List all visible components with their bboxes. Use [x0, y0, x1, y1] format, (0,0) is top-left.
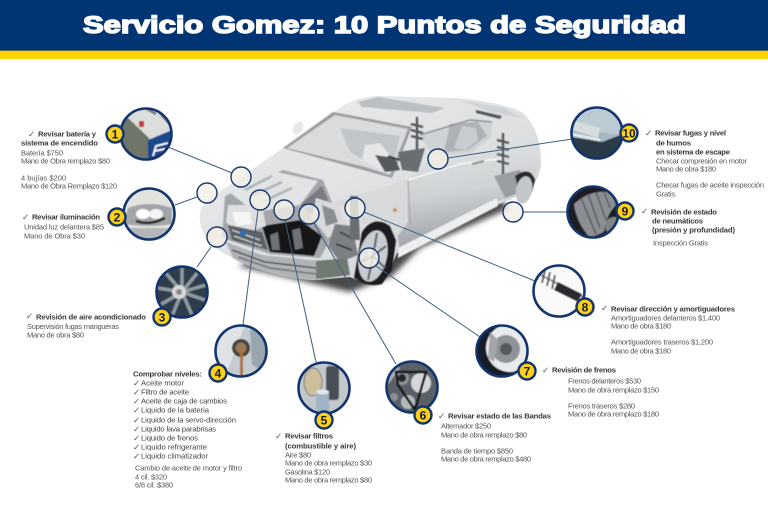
text: point 8: Mano de obra $180 — [611, 346, 671, 356]
text: point 8: ✓ — [601, 304, 608, 314]
connector lines — [168, 139, 572, 364]
text: point 1: 4 bujías $200 — [21, 174, 66, 182]
text: point 10: Checar fugas de aceite inspección — [656, 180, 764, 190]
text: point 7: Frenos traseros $280 — [568, 402, 635, 410]
text: point 5: ✓ — [275, 432, 282, 442]
text: fluid checklist: 4 cil. $320 — [135, 472, 167, 482]
text: point 3 — [26, 312, 146, 340]
text: point 2: Unidad luz delantera $85 — [24, 222, 104, 232]
text: fluid checklist: Liquido de frenos — [141, 434, 198, 442]
door and rear quarter — [397, 135, 540, 250]
front wheel — [354, 221, 396, 285]
text: point 3: Supervisión fugas mangueras — [27, 322, 119, 331]
text: fluid checklist: 6/8 cil. $380 — [135, 480, 173, 490]
text: point 9: Revisión de estado — [651, 208, 717, 216]
car hotspot markers — [197, 149, 523, 268]
front strut — [411, 117, 423, 150]
icon: oil pour: 4 — [215, 366, 222, 380]
text: point 7: Frenos delanteros $530 — [568, 376, 641, 386]
text: point 5: Mano de obra remplazo $30 — [285, 458, 372, 468]
text: point 3: ✓ — [26, 312, 33, 322]
point 7: brakes — [476, 324, 659, 418]
engine bay — [222, 170, 340, 258]
icon: brake disc — [476, 324, 536, 380]
text: point 5: Revisar filtros — [285, 432, 333, 440]
text: point 6: ✓ — [438, 412, 445, 422]
text: point 1: Mano de Obra remplazo $80 — [21, 156, 110, 166]
text: point 9: Inspección Gratis — [653, 238, 708, 248]
title: Servicio Gomez: 10 Puntos de Seguridad — [83, 12, 686, 39]
text: point 7 — [542, 366, 659, 418]
text: point 10: Mano de obra $180 — [656, 164, 716, 174]
text: point 8: Amortiguadores traseros $1,200 — [611, 338, 713, 346]
text: fluid checklist: Liquido lava parabrisas — [141, 424, 216, 434]
icon: tyre — [567, 186, 634, 238]
text: fluid checklist: Liquido de la bateria — [141, 406, 210, 414]
text: fluid checklist: ✓ — [133, 388, 140, 398]
icon: battery: 1 — [112, 128, 119, 142]
text: fluid checklist: Cambio de aceite de motor y filtro — [135, 464, 242, 472]
point 5: filters — [275, 362, 372, 484]
text: fluid checklist: Filtro de aceite — [141, 388, 189, 396]
text: point 8: Amortiguadores delanteros $1,400 — [611, 314, 720, 322]
text: point 5: Gasolina $120 — [285, 468, 330, 476]
side glass and seats — [420, 120, 492, 156]
text: point 7: Revisión de frenos — [552, 366, 616, 374]
icon: oil pour — [210, 325, 267, 382]
text: point 7: ✓ — [542, 366, 549, 376]
text: fluid checklist: Liquido climatizador — [141, 452, 208, 460]
icon: filters: 5 — [321, 414, 328, 428]
text: point 5: Aire $80 — [285, 450, 311, 460]
text: fluid checklist: ✓ — [133, 452, 140, 462]
point 9: tyres — [567, 186, 735, 248]
text: fluid checklist: ✓ — [133, 406, 140, 416]
text: fluid checklist: ✓ — [133, 434, 140, 444]
point 6: belts — [386, 361, 551, 464]
text: point 9: (presión y profundidad) — [652, 226, 735, 234]
text: point 1 — [21, 130, 117, 190]
text: point 1: Mano de Obra Remplazo $120 — [21, 182, 117, 190]
text: point 6: Mano de obra remplazo $80 — [441, 430, 527, 440]
text: point 5: (combustible y aire) — [285, 442, 356, 450]
icon: shock absorber: 8 — [582, 300, 589, 314]
text: point 9: ✓ — [641, 207, 648, 217]
text: point 1: Revisar batería y — [38, 130, 97, 138]
text: fluid checklist: Liquido refrigerante — [141, 442, 207, 452]
text: point 10: Gratis. — [656, 190, 677, 198]
text: point 6 — [438, 412, 551, 464]
text: point 10: de humos — [656, 138, 691, 148]
point 4: fluid levels — [133, 325, 267, 490]
text: point 8: Revisar dirección y amortiguadores — [611, 304, 735, 314]
text: fluid checklist — [133, 370, 242, 490]
text: point 7: Mano de obra remplazo $180 — [568, 410, 659, 418]
text: point 6: Revisar estado de las Bandas — [448, 412, 551, 420]
fender — [320, 180, 408, 240]
text: point 6: Alternador $250 — [441, 422, 491, 430]
text: point 9 — [641, 207, 735, 248]
point 8: shock absorbers — [533, 265, 735, 356]
hood — [232, 150, 363, 195]
bumper — [226, 242, 350, 280]
car illustration — [200, 96, 541, 292]
text: point 2 — [22, 212, 104, 240]
icon: exhaust pipe — [571, 107, 638, 159]
icon: shock absorber — [533, 265, 594, 317]
text: point 2: ✓ — [22, 213, 29, 223]
text: fluid checklist: ✓ — [133, 397, 140, 407]
text: point 6: Banda de tiempo $850 — [441, 446, 513, 456]
roof glass — [358, 97, 445, 113]
text: fluid checklist: Aceite motor — [141, 378, 184, 388]
text: point 10: Checar compresión en motor — [656, 156, 748, 166]
text: fluid checklist: ✓ — [133, 443, 140, 453]
icon: engine belts: 6 — [420, 408, 427, 422]
text: point 8: Mano de obra $180 — [611, 322, 671, 330]
text: point 10: Revisar fugas y nivel — [655, 128, 726, 138]
text: point 2: Mano de Obra $30 — [24, 232, 85, 240]
text: point 1: sistema de encendido — [21, 138, 98, 148]
text: point 5 — [275, 432, 372, 484]
text: fluid checklist: ✓ — [133, 416, 140, 426]
text: fluid checklist: Aceite de caja de cambios — [141, 396, 227, 406]
text: point 8 — [601, 304, 735, 356]
rear strut — [497, 133, 509, 183]
icon: engine belts — [386, 361, 438, 424]
text: point 2: Revisar iluminación — [32, 212, 100, 222]
point 3: air conditioning — [26, 265, 209, 340]
text: fluid checklist: Comprobar niveles: — [133, 370, 202, 378]
text: point 6: Mano de obra remplazo $480 — [441, 454, 531, 464]
windshield — [283, 112, 412, 178]
icon: headlight — [108, 188, 176, 242]
text: point 1: ✓ — [28, 130, 35, 140]
text: point 1: Batería $750 — [21, 148, 63, 158]
point 10: exhaust — [571, 107, 764, 198]
point 1: battery — [21, 108, 172, 190]
text: point 3: Mano de obra $80 — [27, 330, 84, 340]
icon: fan: 3 — [159, 310, 166, 324]
icon: fan — [154, 265, 209, 326]
text: point 7: Mano de obra remplazo $150 — [568, 386, 659, 394]
text: point 10 — [645, 128, 764, 198]
text: point 5: Mano de obra remplazo $80 — [285, 476, 372, 484]
text: fluid checklist: Liquido de la servo-dirección — [141, 416, 236, 424]
text: fluid checklist: ✓ — [133, 379, 140, 389]
point 2: lighting — [22, 188, 176, 242]
icon: headlight: 2 — [114, 210, 121, 224]
text: fluid checklist: ✓ — [133, 425, 140, 435]
text: point 10: ✓ — [645, 129, 652, 139]
icon: tyre: 9 — [622, 204, 629, 218]
text: point 3: Revisión de aire acondicionado — [36, 312, 146, 322]
text: point 9: de neumáticos — [652, 216, 703, 226]
icon: battery — [106, 108, 172, 160]
mirror — [291, 120, 305, 136]
icon: exhaust pipe: 10 — [622, 128, 636, 140]
text: point 10: en sistema de escape — [656, 148, 731, 156]
header banner — [0, 0, 768, 59]
icon: brake disc: 7 — [524, 364, 531, 378]
